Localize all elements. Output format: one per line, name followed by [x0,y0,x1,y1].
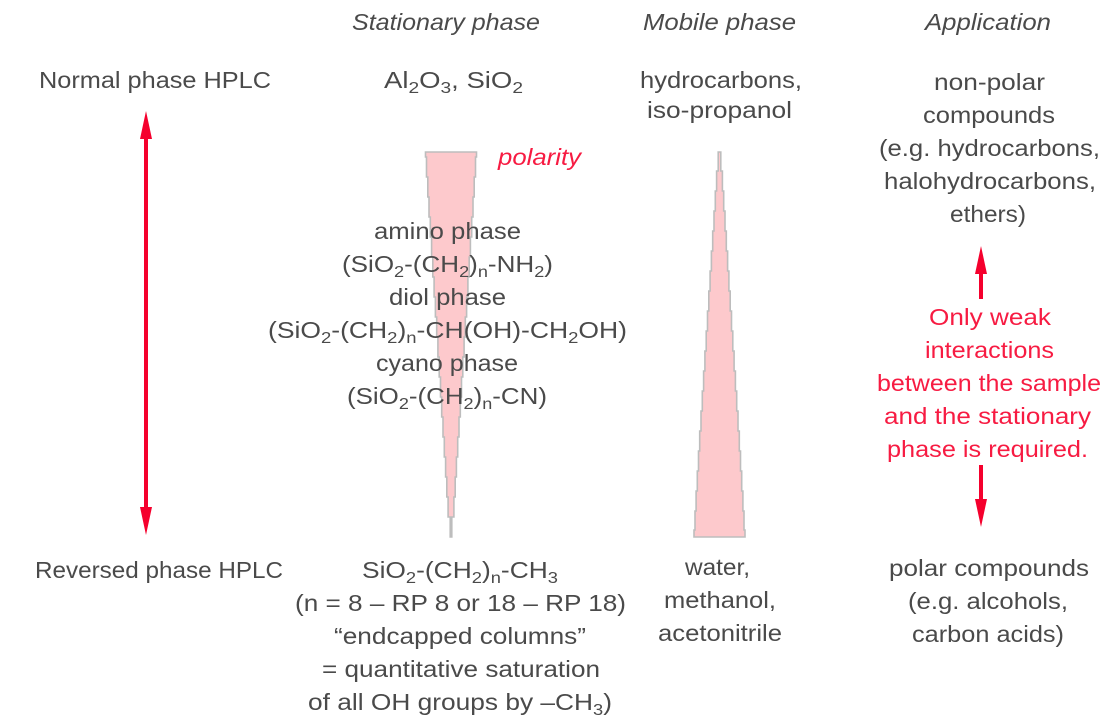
application reversed: polar compounds [889,555,1089,581]
stationary phase reversed: description: = quantitative saturation [322,656,600,682]
stationary phase reversed: description: 3 [593,702,603,719]
callout: weak interactions: between the sample [877,370,1101,396]
application normal: halohydrocarbons, [884,168,1096,194]
stationary phase intermediate list: n [478,264,488,281]
application normal: (e.g. hydrocarbons, [879,135,1100,161]
application reversed: (e.g. alcohols, [908,588,1068,614]
stationary phase intermediate list: ) [544,251,553,277]
stationary phase reversed: description: -CH [501,557,548,583]
mobile phase reversed: water, [684,554,750,580]
callout: weak interactions: Only weak [929,304,1052,330]
stationary phase intermediate list: 2 [459,264,469,281]
stationary phase intermediate list [268,218,627,413]
stationary phase reversed: description: “endcapped columns” [334,623,586,649]
mobile phase normal: hydrocarbons, [640,67,802,93]
mobile phase normal: iso-propanol [647,97,792,123]
callout: weak interactions: phase is required. [887,436,1088,462]
stationary phase normal: formula: Al [384,67,404,93]
stationary phase intermediate list: -NH [488,251,534,277]
stationary phase intermediate list: -(CH [331,317,387,343]
stationary phase reversed: description: -(CH [416,557,472,583]
stationary phase reversed: description: n [491,570,501,587]
stationary phase intermediate list: 2 [321,330,331,347]
mobile phase reversed: methanol, [664,587,776,613]
application normal: non-polar [934,69,1045,95]
arrow: down to application reversed [975,465,987,527]
stationary phase reversed: description: of all OH groups by –CH [308,689,557,715]
column headings [352,9,1051,35]
application normal: compounds [923,102,1055,128]
stationary phase intermediate list: 2 [464,396,474,413]
polarity wedge: mobile phase [694,152,745,537]
stationary phase intermediate list: n [406,330,417,347]
row label: reversed phase HPLC: Reversed phase HPLC [35,557,283,583]
stationary phase intermediate list: 2 [568,330,579,347]
column headings: Stationary phase [352,9,540,35]
callout: weak interactions: interactions [925,337,1054,363]
stationary phase intermediate list: -(CH [409,383,464,409]
stationary phase intermediate list: (SiO [342,251,388,277]
stationary phase normal: formula: 3 [441,80,451,97]
row label: normal phase HPLC: Normal phase HPLC [39,67,271,93]
polarity wedge: stationary phase [426,152,476,537]
arrow: normal to reversed phase [140,111,152,535]
stationary phase normal: formula: 2 [408,80,419,97]
stationary phase normal: formula: , SiO [451,67,512,93]
polarity label: polarity [497,144,583,170]
callout: weak interactions [877,304,1101,462]
stationary phase reversed: description: (n = 8 – RP 8 or 18 – RP 18) [295,590,626,616]
stationary phase intermediate list: ) [474,383,482,409]
stationary phase intermediate list: -CH(OH)-CH [417,317,568,343]
stationary phase normal: formula: 2 [512,80,523,97]
stationary phase intermediate list: OH) [578,317,627,343]
column headings: Application [923,9,1051,35]
mobile phase reversed [658,554,782,646]
column headings: Mobile phase [643,9,796,35]
stationary phase intermediate list: ) [469,251,478,277]
stationary phase normal: formula: O [419,67,441,93]
application reversed [889,555,1089,647]
application normal: ethers) [950,201,1026,227]
stationary phase reversed: description: SiO [362,557,400,583]
stationary phase intermediate list: 2 [534,264,544,281]
application reversed: carbon acids) [912,621,1064,647]
stationary phase intermediate list: -(CH [404,251,459,277]
stationary phase intermediate list: cyano phase [376,350,518,376]
mobile phase reversed: acetonitrile [658,620,782,646]
arrow: up to application normal [975,246,987,299]
stationary phase intermediate list: 2 [394,264,404,281]
stationary phase intermediate list: -CN) [492,383,547,409]
stationary phase intermediate list: n [482,396,492,413]
stationary phase reversed: description [295,557,626,719]
stationary phase intermediate list: 2 [387,330,398,347]
stationary phase reversed: description: 2 [406,570,416,587]
stationary phase reversed: description: ) [482,557,491,583]
stationary phase intermediate list: diol phase [389,284,506,310]
stationary phase intermediate list: ) [397,317,406,343]
application normal [879,69,1100,227]
stationary phase reversed: description: 3 [548,570,558,587]
mobile phase normal [640,67,802,123]
stationary phase intermediate list: (SiO [268,317,314,343]
stationary phase reversed: description: ) [603,689,612,715]
stationary phase intermediate list: (SiO [347,383,393,409]
stationary phase reversed: description: 2 [472,570,482,587]
stationary phase intermediate list: amino phase [374,218,521,244]
stationary phase intermediate list: 2 [399,396,409,413]
callout: weak interactions: and the stationary [884,403,1092,429]
